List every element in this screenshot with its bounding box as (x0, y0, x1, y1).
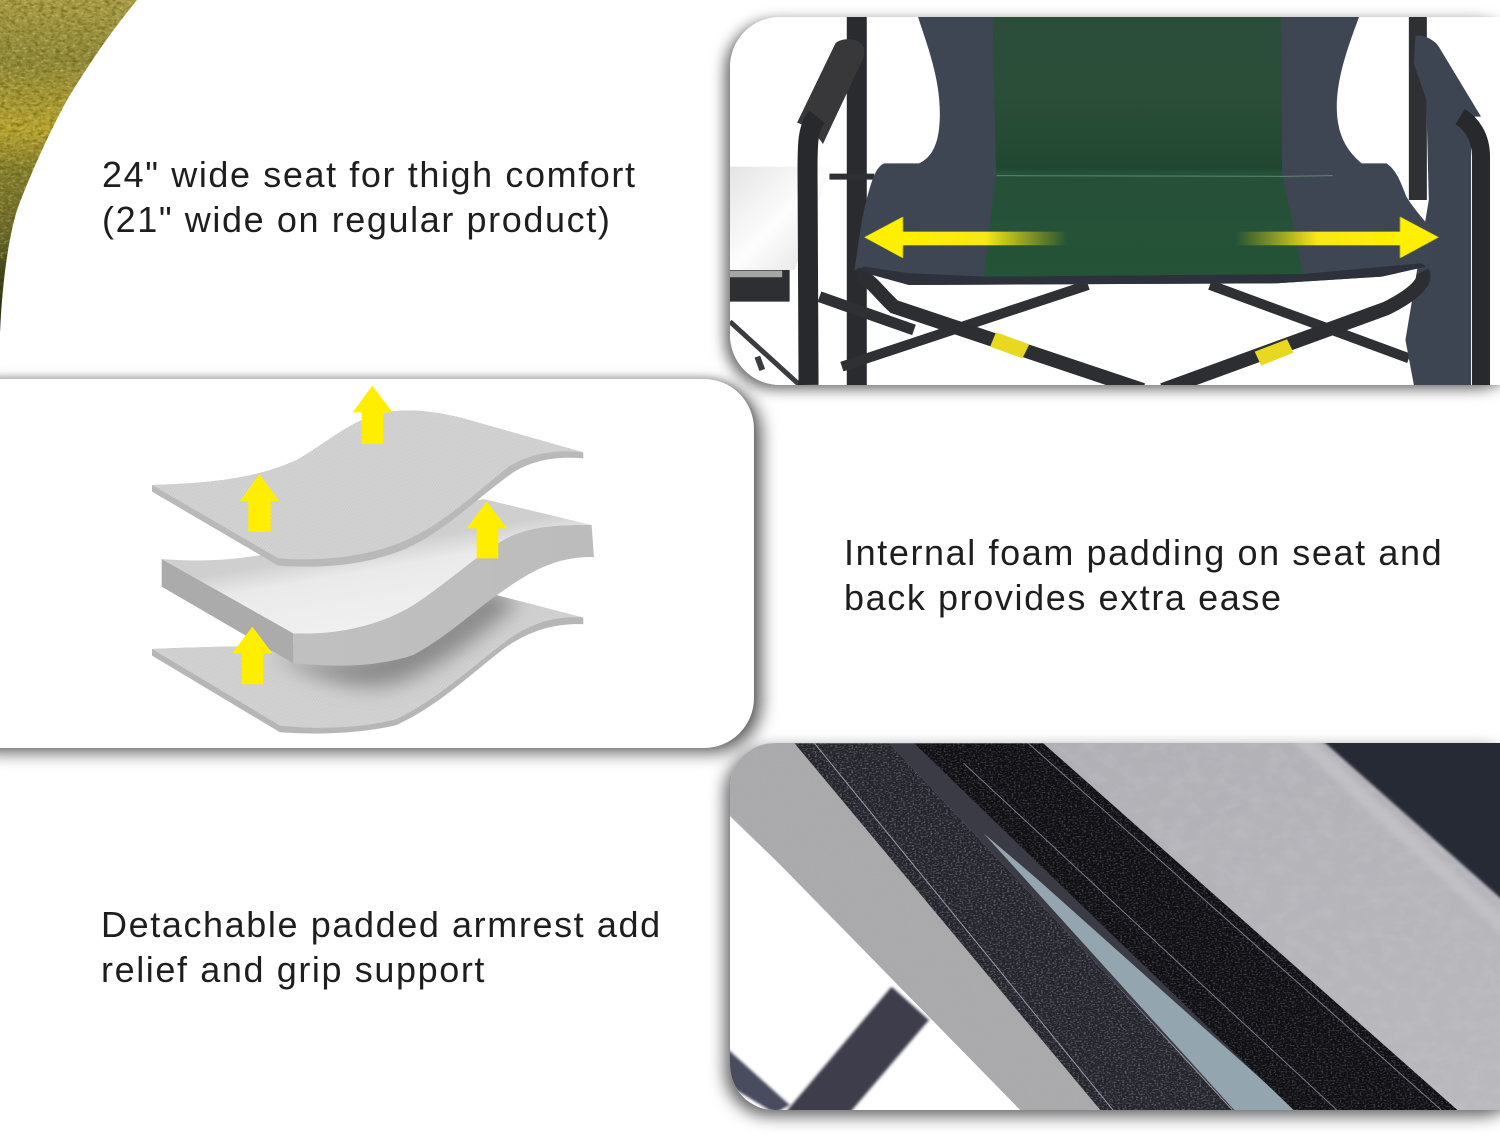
heading text: seat width: 24" wide seat for thigh comfort (102, 154, 637, 195)
seat underside shadow (854, 263, 1426, 285)
side pouch fabric (1405, 35, 1481, 385)
rear posts and cross bars (819, 17, 1418, 385)
bottom sheet (152, 588, 583, 733)
panel: foam layers (0, 379, 754, 748)
foam layers illustration (152, 386, 594, 734)
frame rods (725, 987, 929, 1113)
top sheet (152, 410, 583, 567)
heading text: armrest: relief and grip support (101, 949, 486, 990)
side table (730, 167, 830, 385)
panel shadow: seat photo (730, 17, 1500, 385)
green centre panel (984, 17, 1303, 277)
arm tube left (808, 117, 817, 385)
caution labels (990, 332, 1294, 366)
blue grey strip (889, 743, 1299, 1113)
panel shadow: armrest photo (730, 743, 1500, 1110)
airflow arrows (232, 386, 507, 684)
light fabric area (720, 730, 1500, 1130)
heading text: armrest (101, 904, 662, 990)
fabric mottling (1043, 740, 1500, 1113)
grass background corner (0, 0, 137, 332)
velcro strip one (794, 743, 1234, 1110)
velcro strip two (909, 740, 1466, 1113)
seat and back fabric (854, 17, 1439, 285)
heading text: seat width: (21" wide on regular product) (102, 199, 611, 240)
white background lower left (720, 807, 1038, 1113)
heading text: foam padding: back provides extra ease (844, 577, 1283, 618)
grey edge band (725, 743, 1108, 1113)
velcro close-up illustration (730, 743, 1500, 1110)
arm rest pad left (797, 39, 864, 144)
panel: armrest velcro photo (730, 743, 1500, 1110)
arm tube right (1460, 117, 1481, 385)
width arrows (864, 217, 1439, 258)
heading text: seat width (102, 154, 637, 240)
heading text: foam padding: Internal foam padding on seat and (844, 532, 1443, 573)
seam line (997, 175, 1333, 177)
heading text: armrest: Detachable padded armrest add (101, 904, 662, 945)
panel: wide seat chair photo (730, 17, 1500, 385)
dark upper right corner (1322, 740, 1500, 912)
heading text: foam padding (844, 532, 1443, 618)
front legs crossing (857, 272, 1423, 390)
middle foam (162, 499, 594, 666)
fabric fold highlight (1292, 740, 1500, 947)
